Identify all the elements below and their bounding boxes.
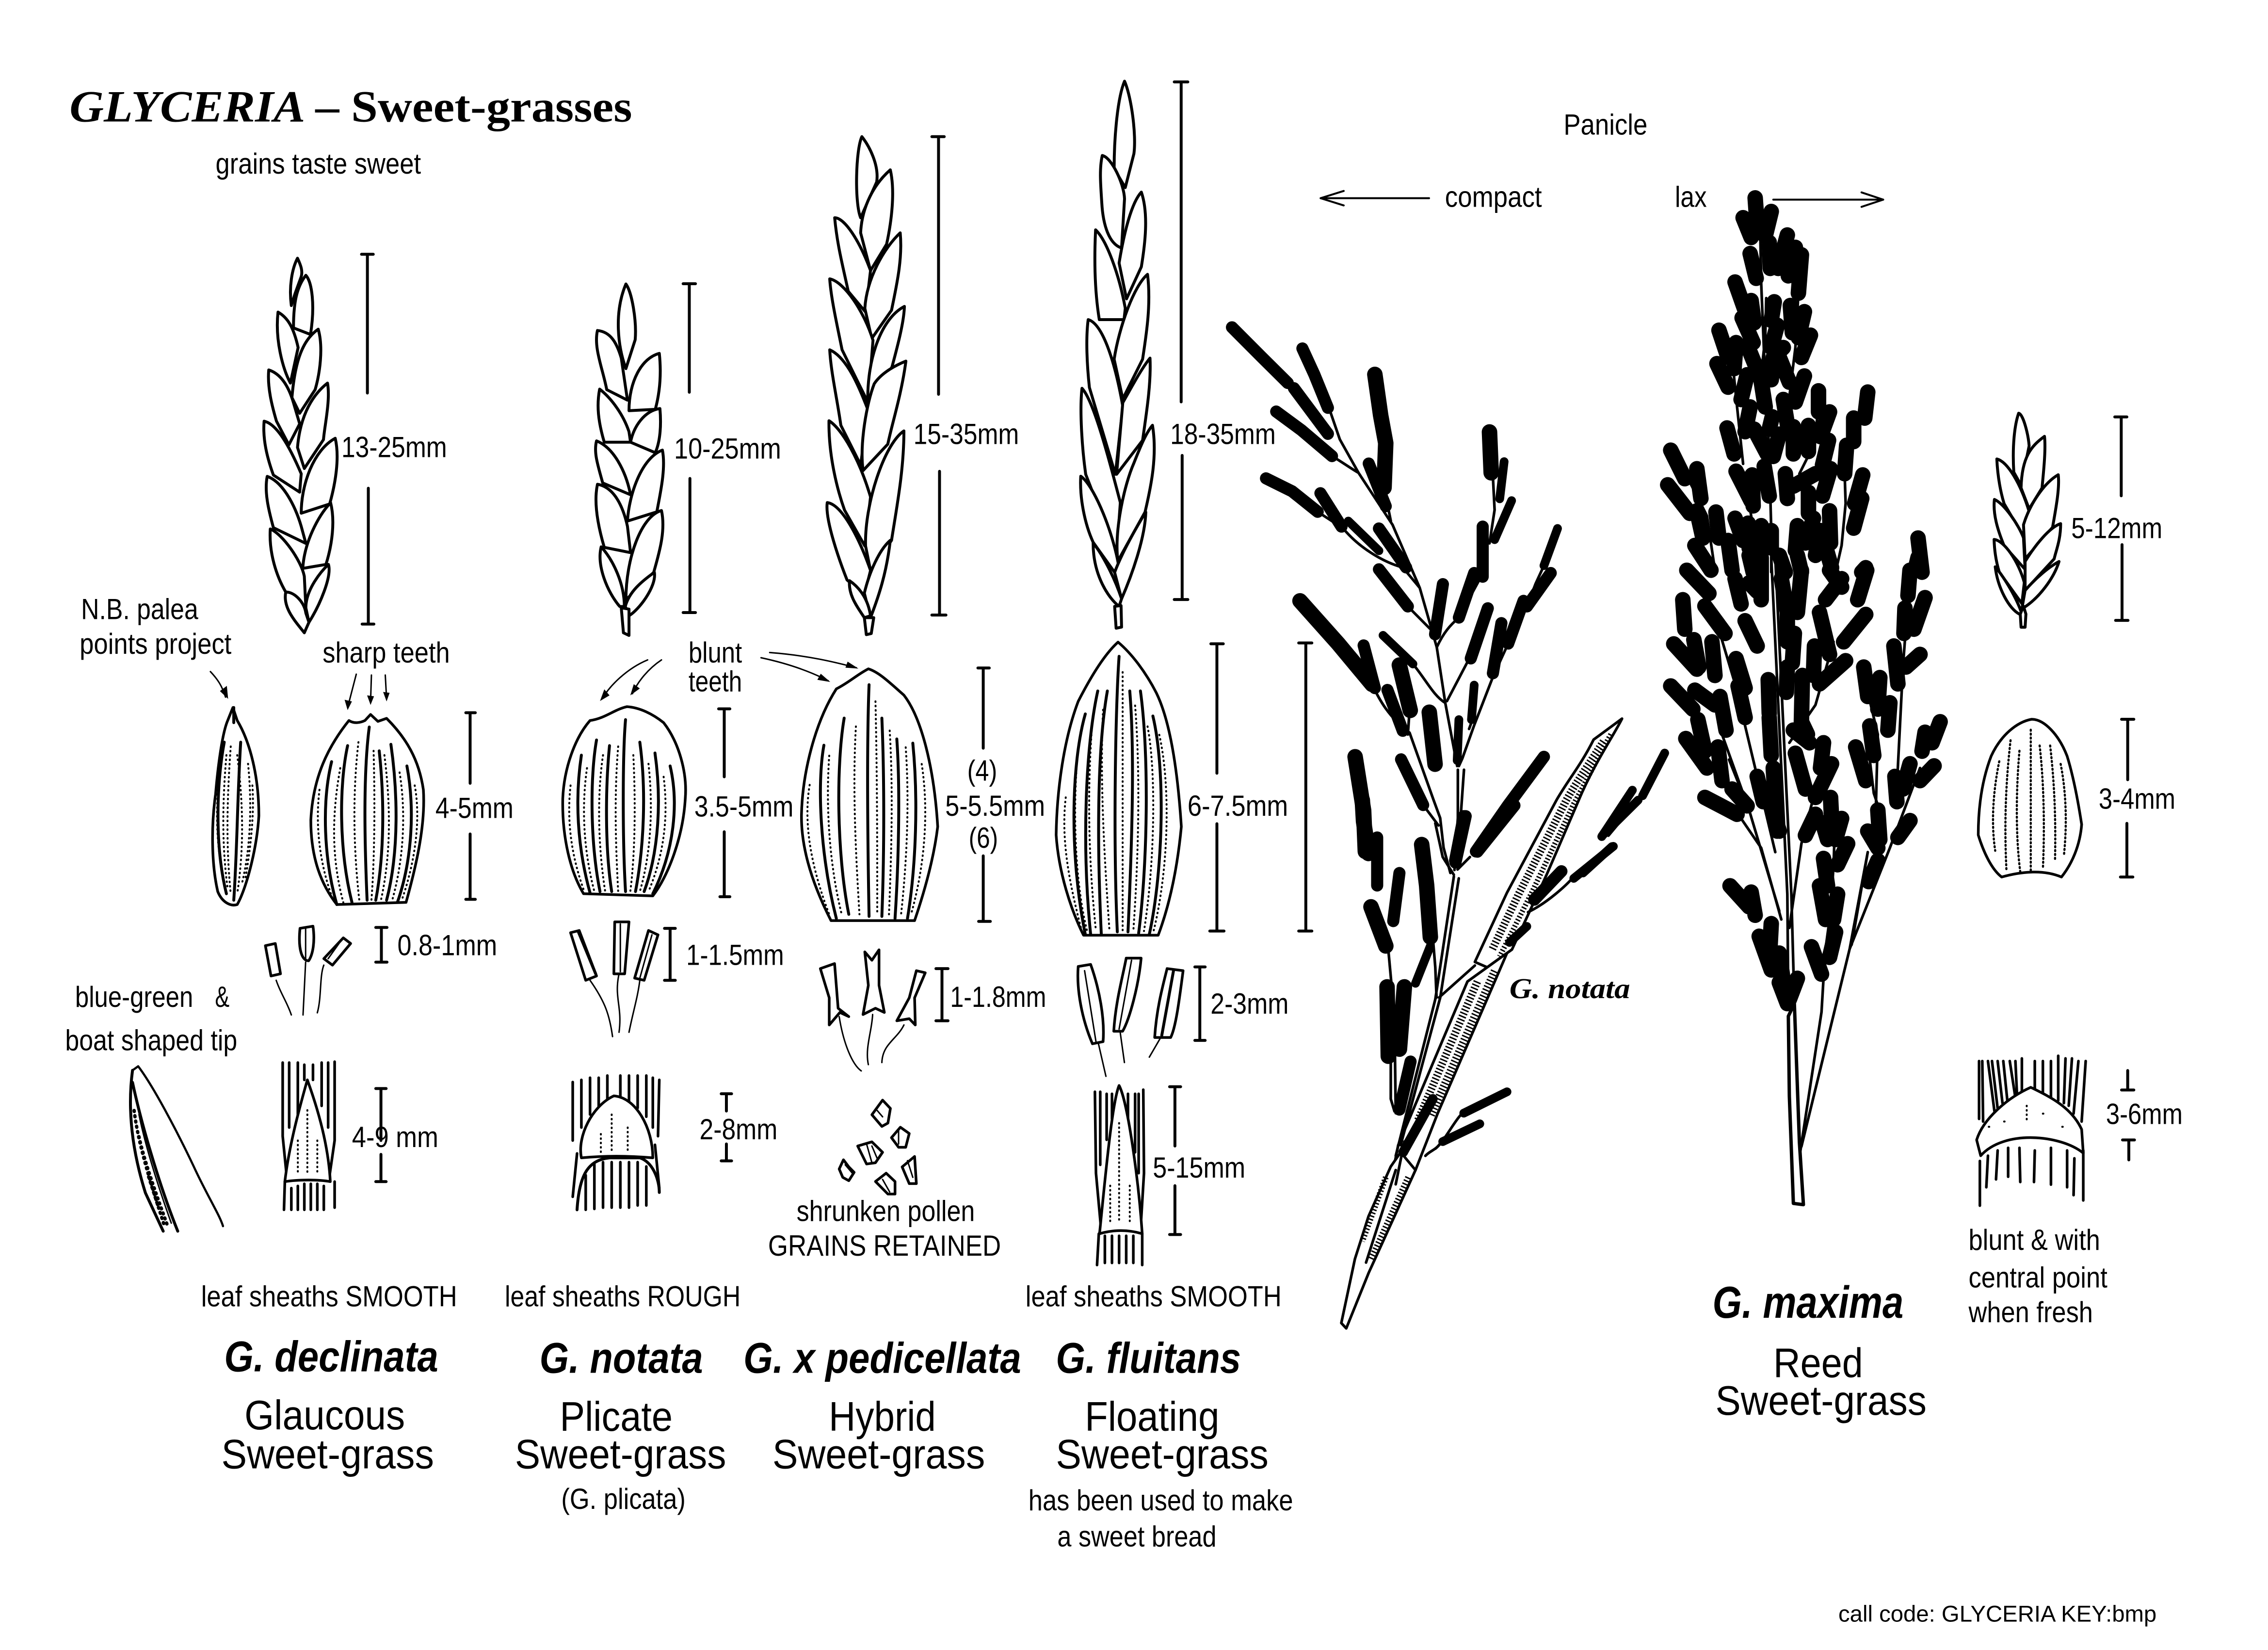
label: compact with arrow: compact xyxy=(1445,180,1542,213)
species: G. notata: Sweet-grass xyxy=(515,1431,726,1477)
note: blue-green and boat shaped tip: boat shaped tip xyxy=(65,1023,237,1056)
notes: leaf sheaths: leaf sheaths SMOOTH xyxy=(201,1279,457,1312)
spikelet: G. fluitans xyxy=(1080,81,1154,628)
species: G. maxima: Reed xyxy=(1773,1340,1863,1386)
leaf blade lower xyxy=(1393,953,1507,1170)
spikelet measurements: 13-25mm xyxy=(341,431,447,464)
icon: boat shaped leaf tip xyxy=(130,1067,223,1231)
note: shrunken pollen, grains retained: shrunken pollen xyxy=(797,1194,975,1227)
title: – Sweet-grasses xyxy=(315,82,632,131)
anthers of G. declinata xyxy=(265,926,387,1015)
species: G. x pedicellata: Sweet-grass xyxy=(772,1431,985,1477)
spikelet measurements: 18-35mm xyxy=(1170,418,1276,451)
species: G. notata: G. notata xyxy=(540,1334,703,1382)
culm base with sheaths xyxy=(1341,1142,1415,1328)
measurements: pedicellata and fluitans: 2-3mm xyxy=(1210,987,1288,1020)
species: G. fluitans: a sweet bread xyxy=(1057,1520,1217,1553)
measurements: pedicellata and fluitans: (6) xyxy=(969,821,998,854)
measurements: declinata and notata lemmas: 2-8mm xyxy=(700,1113,777,1146)
annotation: N.B. palea points project: points project xyxy=(80,627,231,660)
title xyxy=(69,82,632,131)
species: G. notata xyxy=(515,1334,726,1515)
spikelet: G. notata xyxy=(595,284,663,635)
panicle: G. notata lower with leaf blades xyxy=(1341,719,1638,1328)
species: G. declinata: Glaucous xyxy=(244,1392,405,1439)
species: G. x pedicellata: Hybrid xyxy=(829,1394,936,1440)
label: lax with arrow xyxy=(1675,180,1883,213)
measurements: pedicellata and fluitans: 5-5.5mm xyxy=(945,789,1045,822)
call code: call code: GLYCERIA KEY:bmp xyxy=(1838,1601,2156,1627)
lemmas and details: declinata and notata column xyxy=(210,652,858,1210)
annotation: sharp teeth: sharp teeth xyxy=(322,636,450,669)
spikelet measurements xyxy=(341,418,1276,465)
measurements: declinata and notata lemmas: 4-9 mm xyxy=(352,1120,438,1153)
spikelets small xyxy=(1348,462,1665,873)
spikelet measurements: 15-35mm xyxy=(914,418,1019,451)
ligule of G. maxima xyxy=(1977,1056,2135,1206)
scale bars: spikelets declinata and notata xyxy=(362,254,695,624)
measurements: G. maxima: 5-12mm xyxy=(2071,512,2162,545)
species: G. declinata xyxy=(221,1332,438,1477)
species: G. notata: Plicate xyxy=(560,1394,673,1440)
title: GLYCERIA xyxy=(69,82,305,131)
annotation: blunt teeth: teeth xyxy=(689,665,742,698)
anthers of G. x pedicellata xyxy=(820,950,948,1071)
note: grains taste sweet: grains taste sweet xyxy=(216,147,421,180)
panicle heading: Panicle xyxy=(1563,108,1647,141)
note: blunt and with central point when fresh: when fresh xyxy=(1968,1295,2093,1328)
spikelet: G. x pedicellata xyxy=(827,137,906,635)
stems xyxy=(1705,558,1920,1151)
stems xyxy=(1388,800,1638,1156)
measurements: pedicellata and fluitans: 5-15mm xyxy=(1153,1151,1245,1184)
lemma of G. notata xyxy=(563,707,686,896)
lemma of G. declinata xyxy=(311,714,424,905)
measurements: pedicellata and fluitans: 1-1.8mm xyxy=(950,980,1046,1013)
species: G. notata: (G. plicata) xyxy=(561,1482,686,1515)
note: blue-green and boat shaped tip: & xyxy=(215,980,229,1013)
species: G. maxima: Sweet-grass xyxy=(1716,1378,1927,1424)
note: shrunken pollen, grains retained xyxy=(768,1194,1001,1262)
G. maxima details xyxy=(1977,417,2135,1206)
spikelets xyxy=(1362,800,1638,1152)
panicle: G. notata upper xyxy=(1232,327,1665,873)
note: blue-green and boat shaped tip: blue-green xyxy=(75,980,193,1013)
measurements: declinata and notata lemmas: 1-1.5mm xyxy=(686,938,784,971)
measurements: declinata and notata lemmas: 3.5-5mm xyxy=(694,790,793,823)
species: G. fluitans: Sweet-grass xyxy=(1056,1431,1269,1477)
scale bars: lemma xyxy=(2121,719,2134,877)
anthers of G. notata xyxy=(571,922,676,1036)
species: G. fluitans: has been used to make xyxy=(1029,1484,1293,1517)
measurements: G. maxima: 3-6mm xyxy=(2106,1098,2183,1131)
spikelets xyxy=(1668,198,1922,572)
species: G. fluitans: Floating xyxy=(1085,1394,1219,1440)
scale bars: spikelets pedicellata and fluitans xyxy=(932,82,1188,615)
anthers of G. fluitans xyxy=(1078,958,1205,1076)
measurements: G. maxima xyxy=(2071,512,2183,1131)
note: blunt and with central point when fresh: blunt & with xyxy=(1968,1223,2100,1256)
label: compact with arrow xyxy=(1320,180,1542,213)
scale bars: spikelet xyxy=(2115,417,2128,620)
spikelets large xyxy=(1300,374,1491,851)
annotation: N.B. palea points project: N.B. palea xyxy=(81,593,198,626)
spikelets medium xyxy=(1232,327,1551,862)
spikelets xyxy=(1671,558,1940,1003)
notes: leaf sheaths: leaf sheaths SMOOTH xyxy=(1026,1279,1282,1312)
icon: pointer arrows xyxy=(210,652,858,710)
measurements: pedicellata and fluitans: (4) xyxy=(967,754,997,787)
stems xyxy=(1687,229,1846,572)
species: G. maxima xyxy=(1713,1277,1927,1424)
measurements: declinata and notata lemmas: 0.8-1mm xyxy=(397,928,497,961)
leaf sheath ligule of G. fluitans xyxy=(1095,1085,1181,1265)
leaf blade upper xyxy=(1475,719,1622,967)
measurements: declinata and notata lemmas: 4-5mm xyxy=(435,791,514,824)
note: blue-green and boat shaped tip xyxy=(65,980,237,1056)
leaf sheath ligule of G. notata xyxy=(573,1076,732,1210)
scale bars: lemmas xyxy=(466,709,730,899)
species: G. x pedicellata: G. x pedicellata xyxy=(743,1334,1021,1382)
branches xyxy=(1318,410,1642,873)
label: lax with arrow: lax xyxy=(1675,180,1707,213)
notes: leaf sheaths: leaf sheaths ROUGH xyxy=(505,1279,740,1312)
measurements: declinata and notata lemmas xyxy=(352,790,793,1153)
shrunken pollen grains xyxy=(839,1100,917,1194)
species: G. maxima: G. maxima xyxy=(1713,1277,1903,1327)
spikelet: G. declinata xyxy=(264,258,337,633)
leaf sheath ligule of G. declinata xyxy=(283,1062,386,1210)
label: G. notata panicle: G. notata xyxy=(1510,972,1630,1004)
annotation: blunt teeth: blunt xyxy=(689,636,742,669)
annotation: N.B. palea points project xyxy=(80,593,231,660)
lemma of G. x pedicellata xyxy=(802,669,938,921)
lemmas and details: pedicellata and fluitans column xyxy=(802,642,1312,1265)
note: blunt and with central point when fresh xyxy=(1968,1223,2107,1328)
panicle: G. maxima upper xyxy=(1668,198,1922,572)
annotation: blunt teeth xyxy=(689,636,742,698)
lemma of G. fluitans xyxy=(1056,642,1181,935)
species: G. fluitans xyxy=(1029,1334,1293,1553)
panicle: G. maxima lower xyxy=(1671,558,1940,1205)
scale bars: lemmas xyxy=(978,643,1312,931)
measurements: pedicellata and fluitans xyxy=(945,754,1288,1184)
species: G. x pedicellata xyxy=(743,1334,1021,1477)
spikelet: G. maxima xyxy=(1994,413,2060,627)
note: blunt and with central point when fresh: central point xyxy=(1968,1261,2107,1294)
lemma of G. maxima xyxy=(1978,719,2082,877)
species: G. declinata: G. declinata xyxy=(224,1332,438,1381)
stalk xyxy=(1788,1003,1803,1205)
spikelet measurements: 10-25mm xyxy=(674,432,781,465)
measurements: pedicellata and fluitans: 6-7.5mm xyxy=(1188,789,1288,822)
species: G. fluitans: G. fluitans xyxy=(1056,1334,1241,1382)
palea of G. declinata xyxy=(212,708,259,905)
notes: leaf sheaths xyxy=(201,1279,1282,1312)
note: shrunken pollen, grains retained: GRAINS RETAINED xyxy=(768,1229,1001,1262)
species: G. declinata: Sweet-grass xyxy=(221,1431,434,1477)
measurements: G. maxima: 3-4mm xyxy=(2099,782,2175,815)
